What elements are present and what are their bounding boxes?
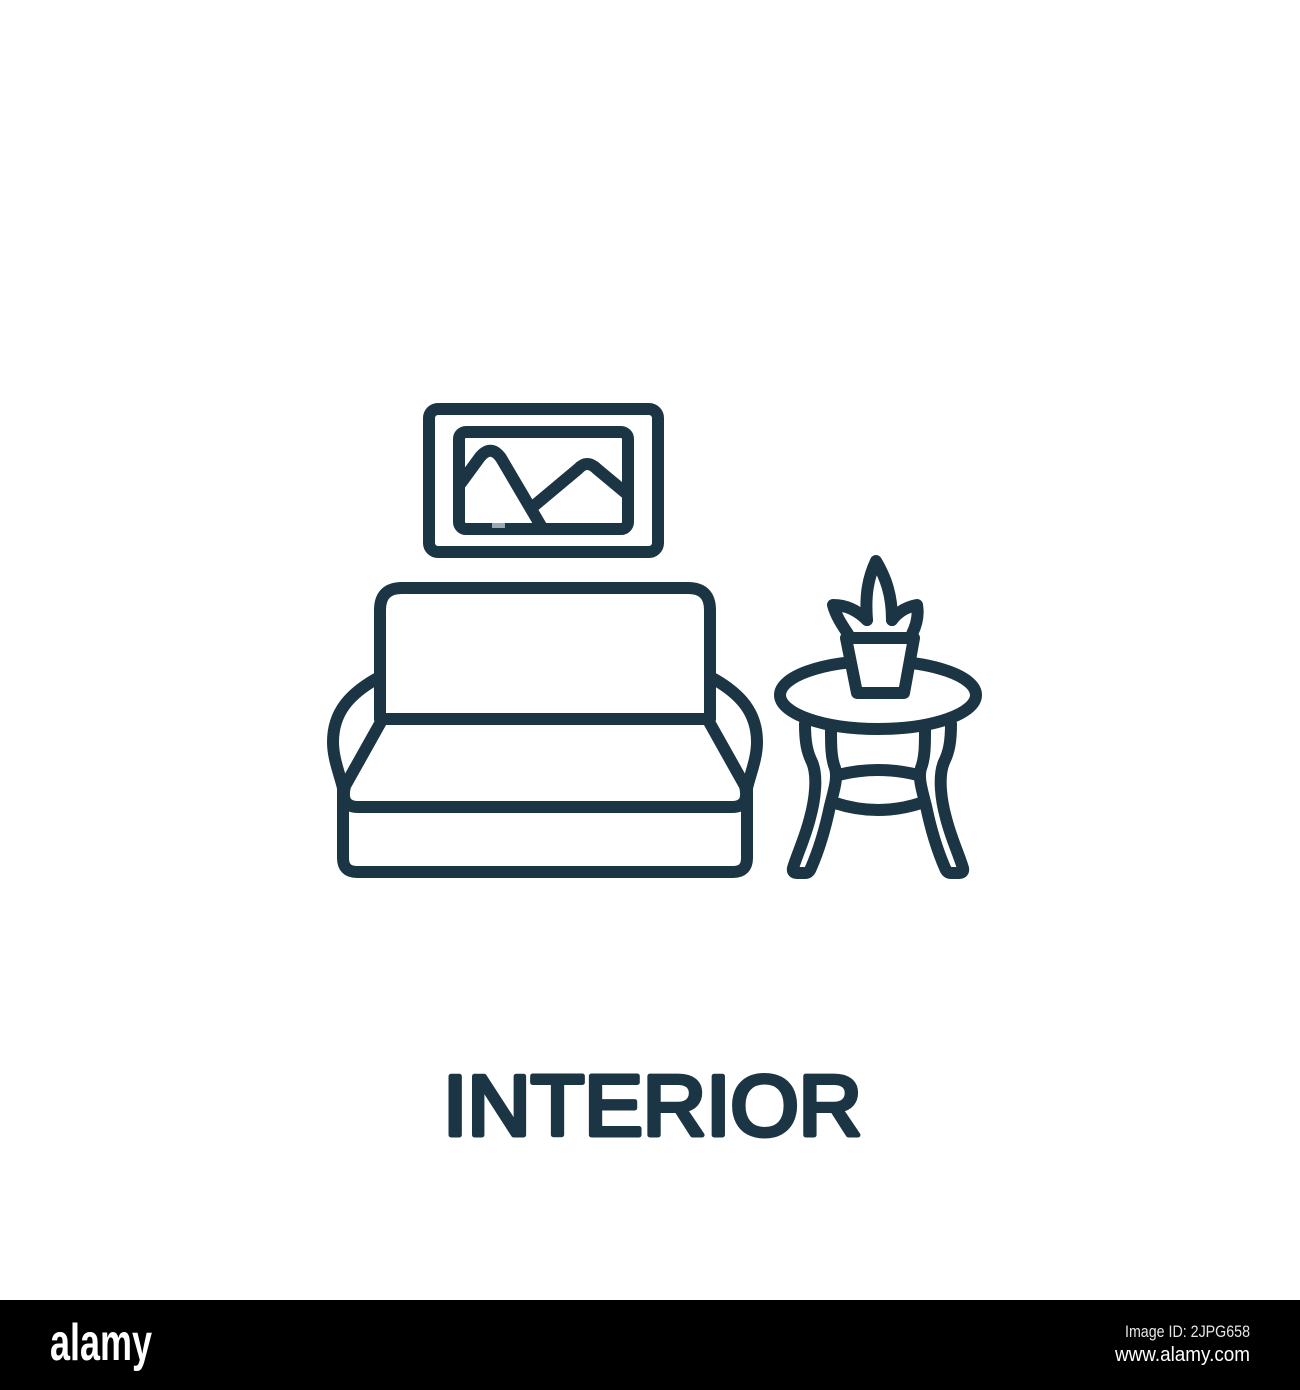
footer bar (0, 1300, 1300, 1390)
sofa base (343, 790, 747, 872)
title: INTERIOR (443, 1059, 862, 1154)
plant pot (846, 638, 914, 693)
icon: side table with plant (780, 561, 976, 873)
icon: picture frame (429, 409, 658, 552)
table shelf (838, 770, 918, 775)
website: www.alamy.com (1114, 1344, 1250, 1366)
footer logo: alamy (50, 1314, 152, 1372)
image id: Image ID: 2JPG658 (1125, 1322, 1250, 1341)
sofa left arm (333, 679, 376, 788)
icon: sofa (333, 588, 757, 872)
icon: interior scene (333, 409, 976, 873)
sofa seat (344, 720, 746, 807)
sofa right arm (714, 679, 757, 788)
table legs (793, 724, 836, 873)
sofa back (380, 588, 710, 719)
plant leaves (866, 561, 892, 620)
table top (780, 661, 976, 729)
